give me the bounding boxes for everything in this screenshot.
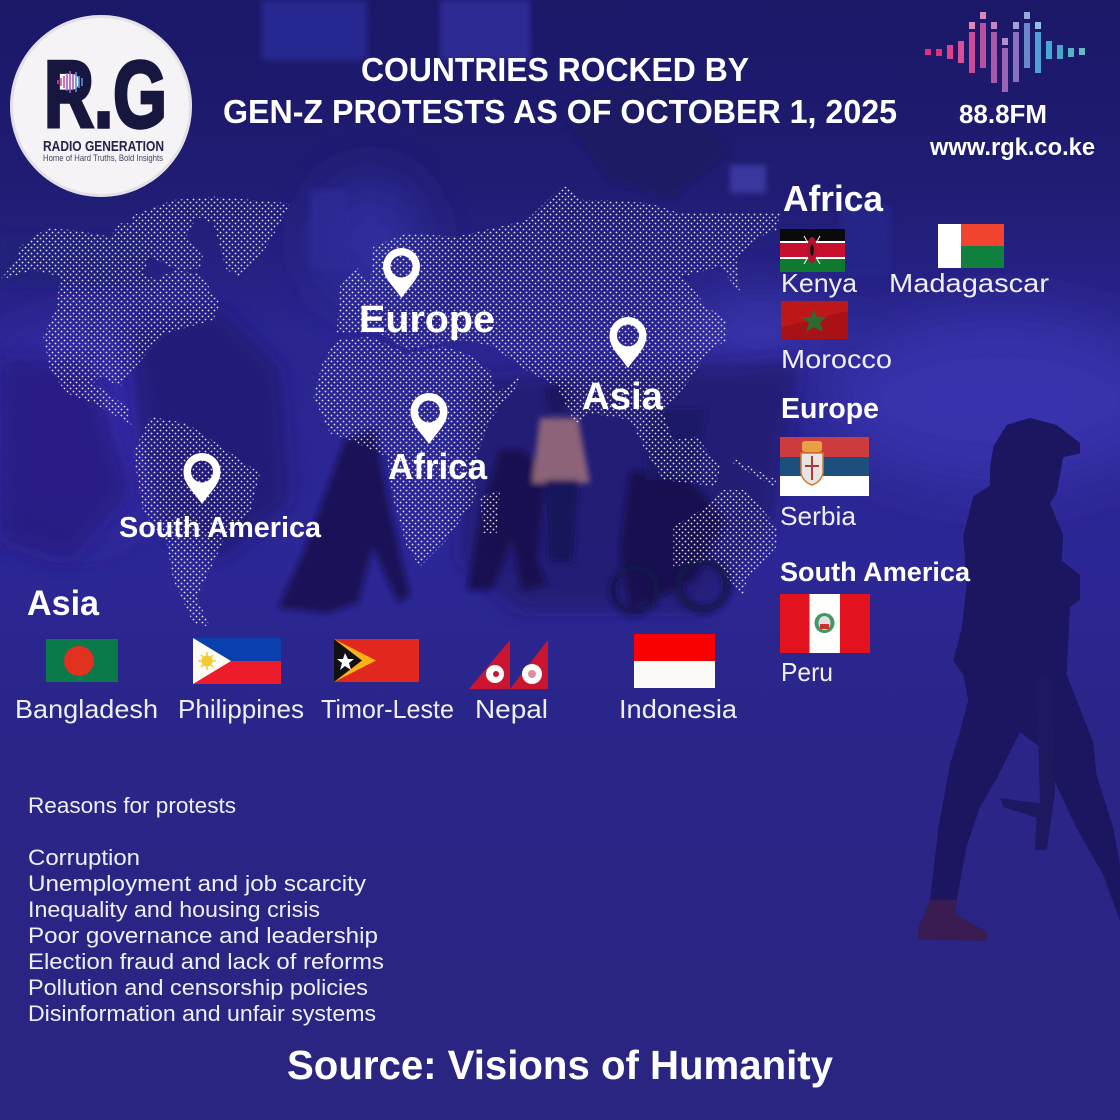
text block: reasons for protests: Disinformation and unfair systems: [28, 1001, 376, 1026]
title: [223, 51, 897, 130]
right figure silhouette with rifle: [918, 418, 1120, 941]
map label: Asia: Asia: [582, 376, 664, 418]
radio frequency and website: www.rgk.co.ke: [929, 134, 1095, 161]
title: COUNTRIES ROCKED BY: [361, 51, 749, 88]
panel: Africa countries: [780, 178, 1049, 374]
logo: Radio Generation badge: RADIO GENERATION: [43, 138, 164, 155]
flag: Peru: [780, 594, 870, 653]
text block: reasons for protests: Unemployment and job scarcity: [28, 871, 366, 896]
pin: South America: [184, 453, 220, 504]
text block: reasons for protests: Election fraud and lack of reforms: [28, 949, 384, 974]
text block: reasons for protests: [28, 793, 384, 1026]
text block: reasons for protests: Inequality and housing crisis: [28, 897, 320, 922]
label: Nepal: Nepal: [475, 694, 548, 724]
logo wordmark R.G: R.G: [44, 42, 167, 148]
pin: Europe: [383, 248, 420, 298]
text block: reasons for protests: Reasons for protests: [28, 793, 236, 818]
label: Bangladesh: Bangladesh: [15, 694, 158, 724]
flag: Indonesia: [634, 634, 715, 688]
label: Indonesia: Indonesia: [619, 694, 738, 724]
title: GEN-Z PROTESTS AS OF OCTOBER 1, 2025: [223, 93, 897, 130]
world map: dotted continents: [0, 170, 800, 640]
flag: Madagascar: [938, 224, 1004, 268]
flag: Bangladesh: [46, 639, 118, 682]
logo: Radio Generation badge: Home of Hard Truths, Bold Insights: [43, 153, 163, 164]
heading: Africa: Africa: [783, 178, 884, 219]
panel: Asia countries: [15, 584, 738, 724]
source line: Source: Visions of Humanity: [287, 1042, 833, 1088]
text block: reasons for protests: Corruption: [28, 845, 140, 870]
radio frequency and website: [929, 99, 1095, 161]
map label: Africa: Africa: [388, 446, 488, 487]
flag: Kenya: [780, 229, 845, 272]
label: Timor-Leste: Timor-Leste: [321, 694, 454, 724]
logo: Radio Generation badge: [10, 15, 192, 197]
heading: Asia: Asia: [27, 584, 100, 623]
map label: South America: South America: [119, 512, 322, 544]
pin: Africa: [410, 393, 448, 444]
pin: Asia: [610, 317, 646, 368]
flag: Morocco: [781, 301, 848, 339]
text block: reasons for protests: Pollution and censorship policies: [28, 975, 368, 1000]
label: Kenya: Kenya: [781, 268, 858, 298]
label: Serbia: Serbia: [780, 501, 857, 531]
radio frequency and website: 88.8FM: [959, 99, 1047, 129]
flag: Timor-Leste: [334, 639, 419, 682]
flag: Serbia: [780, 437, 869, 496]
label: Philippines: Philippines: [178, 694, 304, 724]
label: Peru: Peru: [781, 657, 833, 687]
background crowd silhouettes: [0, 310, 800, 613]
heading: South America: South America: [780, 557, 971, 587]
icon: radio equalizer bars: [925, 12, 1085, 92]
label: Madagascar: Madagascar: [889, 268, 1049, 298]
logo waveform: [58, 71, 82, 93]
text block: reasons for protests: Poor governance and leadership: [28, 923, 378, 948]
panel: Europe countries: [780, 393, 879, 531]
flag: Philippines: [193, 638, 281, 684]
label: Morocco: Morocco: [781, 344, 892, 374]
panel: South America countries: [780, 557, 971, 687]
flag: Nepal: [469, 640, 548, 689]
map label: Europe: Europe: [359, 299, 495, 341]
heading: Europe: Europe: [781, 393, 879, 425]
